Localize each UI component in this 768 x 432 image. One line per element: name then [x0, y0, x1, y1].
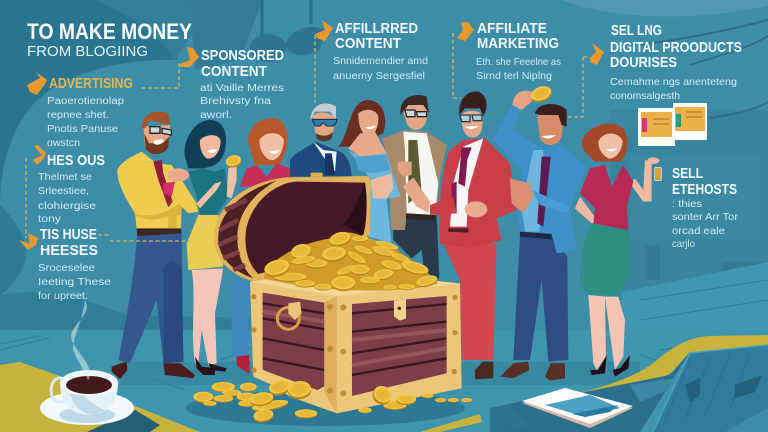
block: affiliate marketing: MARKETING — [477, 35, 559, 52]
block: selling digital products: DOURISES — [610, 54, 677, 71]
block: hes ous: HES OUS — [47, 152, 105, 169]
block: tis huse heeses: TIS HUSE — [40, 226, 97, 243]
block: sell ethosts: SELL — [672, 165, 703, 182]
block: sponsored content: aworl. — [200, 109, 232, 121]
yellow curve right — [420, 335, 768, 432]
coin pile — [263, 230, 438, 291]
block: tis huse heeses: Ieeting These — [38, 276, 111, 288]
block: advertising: ADVERTISING — [49, 75, 133, 92]
block: tis huse heeses: for upreet. — [38, 290, 88, 302]
connector dashed lines — [26, 33, 590, 241]
people: blue suit man, woman in blue, tan jacket man, red suit man — [290, 91, 517, 379]
block: hes ous: clohiergise — [38, 200, 96, 212]
block: sponsored content: CONTENT — [201, 63, 267, 80]
block: sponsored content: SPONSORED — [201, 47, 284, 64]
block: affillrred content: AFFILLRRED — [335, 20, 418, 37]
block: affillrred content: Snnidemendier amd — [333, 55, 428, 67]
block: selling digital products: Cemahme ngs anenteteng — [610, 76, 737, 88]
block: affiliate marketing — [476, 20, 561, 82]
scattered coins — [193, 377, 472, 424]
block: advertising: repnee shet. — [47, 109, 109, 121]
block: tis huse heeses: HEESES — [40, 242, 98, 259]
coffee cup on saucer — [40, 370, 160, 432]
block: affillrred content — [333, 20, 428, 82]
title: FROM BLOGIING — [27, 43, 148, 60]
icon: digital product documents — [638, 103, 707, 146]
block: affiliate marketing: Sirnd terl Niplng — [476, 70, 552, 82]
block: advertising — [47, 75, 133, 149]
block: sell ethosts: carjlo — [672, 238, 695, 250]
block: affiliate marketing: AFFILIATE — [477, 20, 547, 37]
block: sponsored content: ati Vaille Merres — [200, 82, 284, 94]
title — [27, 19, 192, 60]
block: tis huse heeses — [38, 226, 111, 302]
block: affillrred content: CONTENT — [335, 35, 401, 52]
laptop and tablet — [490, 345, 768, 432]
title: TO MAKE MONEY — [27, 19, 192, 44]
chest lid — [214, 173, 371, 282]
arrow icons — [19, 20, 604, 250]
block: affillrred content: anuemy Sergesfiel — [333, 70, 425, 82]
block: sell ethosts: sonter Arr Tor — [672, 211, 739, 223]
block: advertising: owstcn — [47, 137, 80, 149]
block: advertising: Pnotis Panuse — [47, 123, 118, 135]
steam — [71, 300, 90, 380]
block: affiliate marketing: Eth. she Feeelne as — [476, 56, 561, 68]
people: light blue jacket man and woman in green skirt — [493, 83, 661, 381]
chest body — [250, 270, 462, 413]
block: selling digital products: DIGITAL PROODUCTS — [610, 39, 742, 56]
block: selling digital products — [610, 22, 742, 102]
block: tis huse heeses: Sroceselee — [38, 262, 95, 274]
block: selling digital products: SEL LNG — [611, 22, 662, 39]
block: sell ethosts: ETEHOSTS — [672, 181, 737, 198]
block: sponsored content — [200, 47, 284, 121]
block: advertising: Paoerotienolap — [47, 95, 124, 107]
person: yellow shirt man and woman in teal — [112, 112, 292, 379]
block: sell ethosts — [672, 165, 739, 250]
block: sell ethosts: orcad eale — [672, 225, 725, 237]
block: hes ous: Srleestiee, — [38, 185, 89, 197]
block: sponsored content: Brehivsty fna — [200, 95, 271, 107]
treasure chest with coins — [193, 173, 472, 424]
block: hes ous: tony — [38, 213, 62, 225]
block: hes ous: Thelmet se — [38, 171, 92, 183]
block: sell ethosts: : thies — [672, 198, 702, 210]
block: hes ous — [38, 152, 105, 225]
yellow table left — [0, 362, 200, 432]
block: selling digital products: conomsalgesth — [610, 90, 680, 102]
